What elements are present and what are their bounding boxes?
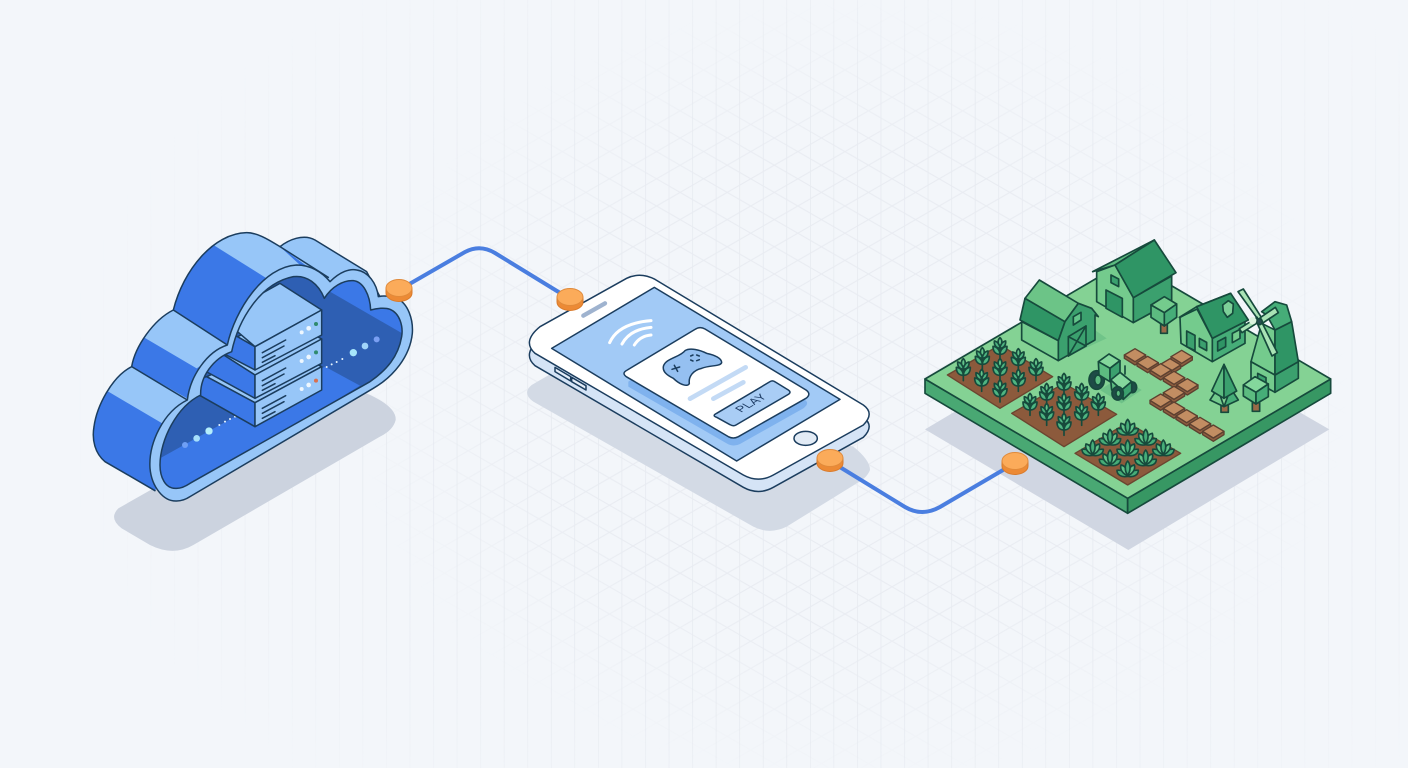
card text placeholder lines [690, 367, 746, 399]
farm ground shadow [925, 407, 1329, 550]
farm illustration [925, 240, 1331, 550]
tractor exhaust [1122, 366, 1127, 374]
field 2 [1012, 373, 1117, 447]
connector node: phone top [557, 288, 583, 310]
phone illustration [527, 275, 870, 531]
cloud interior with floor [161, 277, 402, 488]
cloud front rim [150, 265, 412, 501]
server unit middle [207, 334, 322, 400]
cloud extruded side [90, 227, 380, 491]
field 1 [947, 338, 1053, 408]
phone speaker [583, 303, 605, 316]
barn [1020, 280, 1107, 361]
server unit bottom [200, 365, 322, 428]
home button [794, 431, 817, 445]
big farmhouse [1093, 240, 1176, 323]
stepping stone path [1124, 349, 1224, 441]
pine tree [1210, 364, 1238, 412]
phone top face [529, 275, 869, 479]
play button [714, 381, 790, 426]
cloud ground shadow [114, 393, 396, 551]
data dots left [182, 416, 236, 448]
connector node: farm [1002, 452, 1028, 474]
connector node: cloud [386, 280, 412, 302]
connector: cloud to phone [399, 248, 570, 299]
connector: phone to farm [830, 461, 1015, 512]
connector node: phone bottom [817, 450, 843, 471]
small house [1179, 293, 1248, 362]
field 3 [1075, 419, 1181, 485]
icon: game controller [663, 349, 722, 385]
windmill [1238, 289, 1298, 392]
phone ground shadow [527, 373, 870, 531]
phone body side [529, 288, 869, 491]
phone side buttons [555, 367, 586, 390]
farm platform [925, 260, 1331, 513]
cloud server illustration [90, 227, 413, 551]
cube tree by windmill [1243, 377, 1268, 411]
server rack [193, 283, 322, 427]
cube tree by farmhouse [1151, 297, 1177, 333]
game card [624, 328, 809, 446]
phone screen [552, 287, 840, 461]
server unit top [220, 283, 322, 370]
data dots right [326, 336, 380, 368]
play button: PLAY [732, 392, 770, 414]
windmill blades [1238, 289, 1278, 356]
wifi icon [610, 321, 651, 345]
tractor [1089, 354, 1142, 403]
